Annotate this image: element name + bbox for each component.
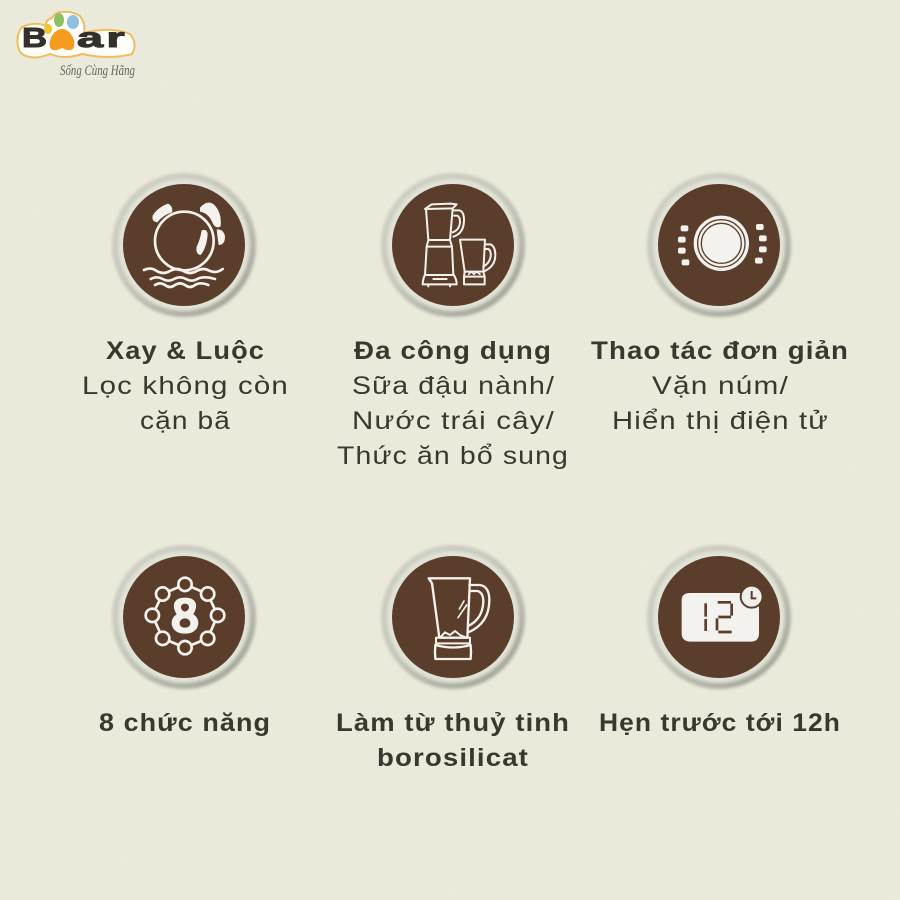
heading: Làm từ thuỷ tinh borosilicat: borosilicat: [377, 744, 529, 772]
heading and text: Đa công dụng: Sữa đậu nành/: [352, 372, 555, 400]
logo: [17, 12, 135, 79]
icon: boil and blend: [112, 173, 256, 317]
heading and text: Xay & Luộc: Lọc không còn: [82, 372, 289, 400]
heading and text: Thao tác đơn giản: Vặn núm/: [652, 372, 789, 400]
heading: Làm từ thuỷ tinh borosilicat: [336, 709, 570, 772]
logo: ar: [77, 22, 128, 53]
icon: glass jar: [381, 545, 525, 689]
heading: 8 chức năng: 8 chức năng: [99, 709, 271, 737]
heading and text: Đa công dụng: Thức ăn bổ sung: [337, 442, 569, 470]
heading and text: Thao tác đơn giản: Thao tác đơn giản: [591, 337, 849, 365]
logo: B: [22, 22, 47, 53]
icon: control dial: [647, 173, 791, 317]
heading and text: Xay & Luộc: cặn bã: [140, 407, 231, 435]
heading and text: Đa công dụng: Nước trái cây/: [352, 407, 555, 435]
icon: eight functions: [112, 545, 256, 689]
icon: blenders: [381, 173, 525, 317]
heading and text: Xay & Luộc: Xay & Luộc: [106, 337, 265, 365]
heading: Hẹn trước tới 12h: Hẹn trước tới 12h: [599, 709, 841, 737]
heading and text: Xay & Luộc: [82, 337, 289, 435]
heading and text: Thao tác đơn giản: [591, 337, 849, 435]
heading: Làm từ thuỷ tinh borosilicat: Làm từ thuỷ tinh: [336, 709, 570, 737]
logo: Sống Cùng Hãng: [60, 63, 135, 79]
icon: 12h timer: [647, 545, 791, 689]
heading and text: Đa công dụng: Đa công dụng: [354, 337, 552, 365]
heading and text: Thao tác đơn giản: Hiển thị điện tử: [612, 407, 829, 435]
heading and text: Đa công dụng: [337, 337, 569, 470]
